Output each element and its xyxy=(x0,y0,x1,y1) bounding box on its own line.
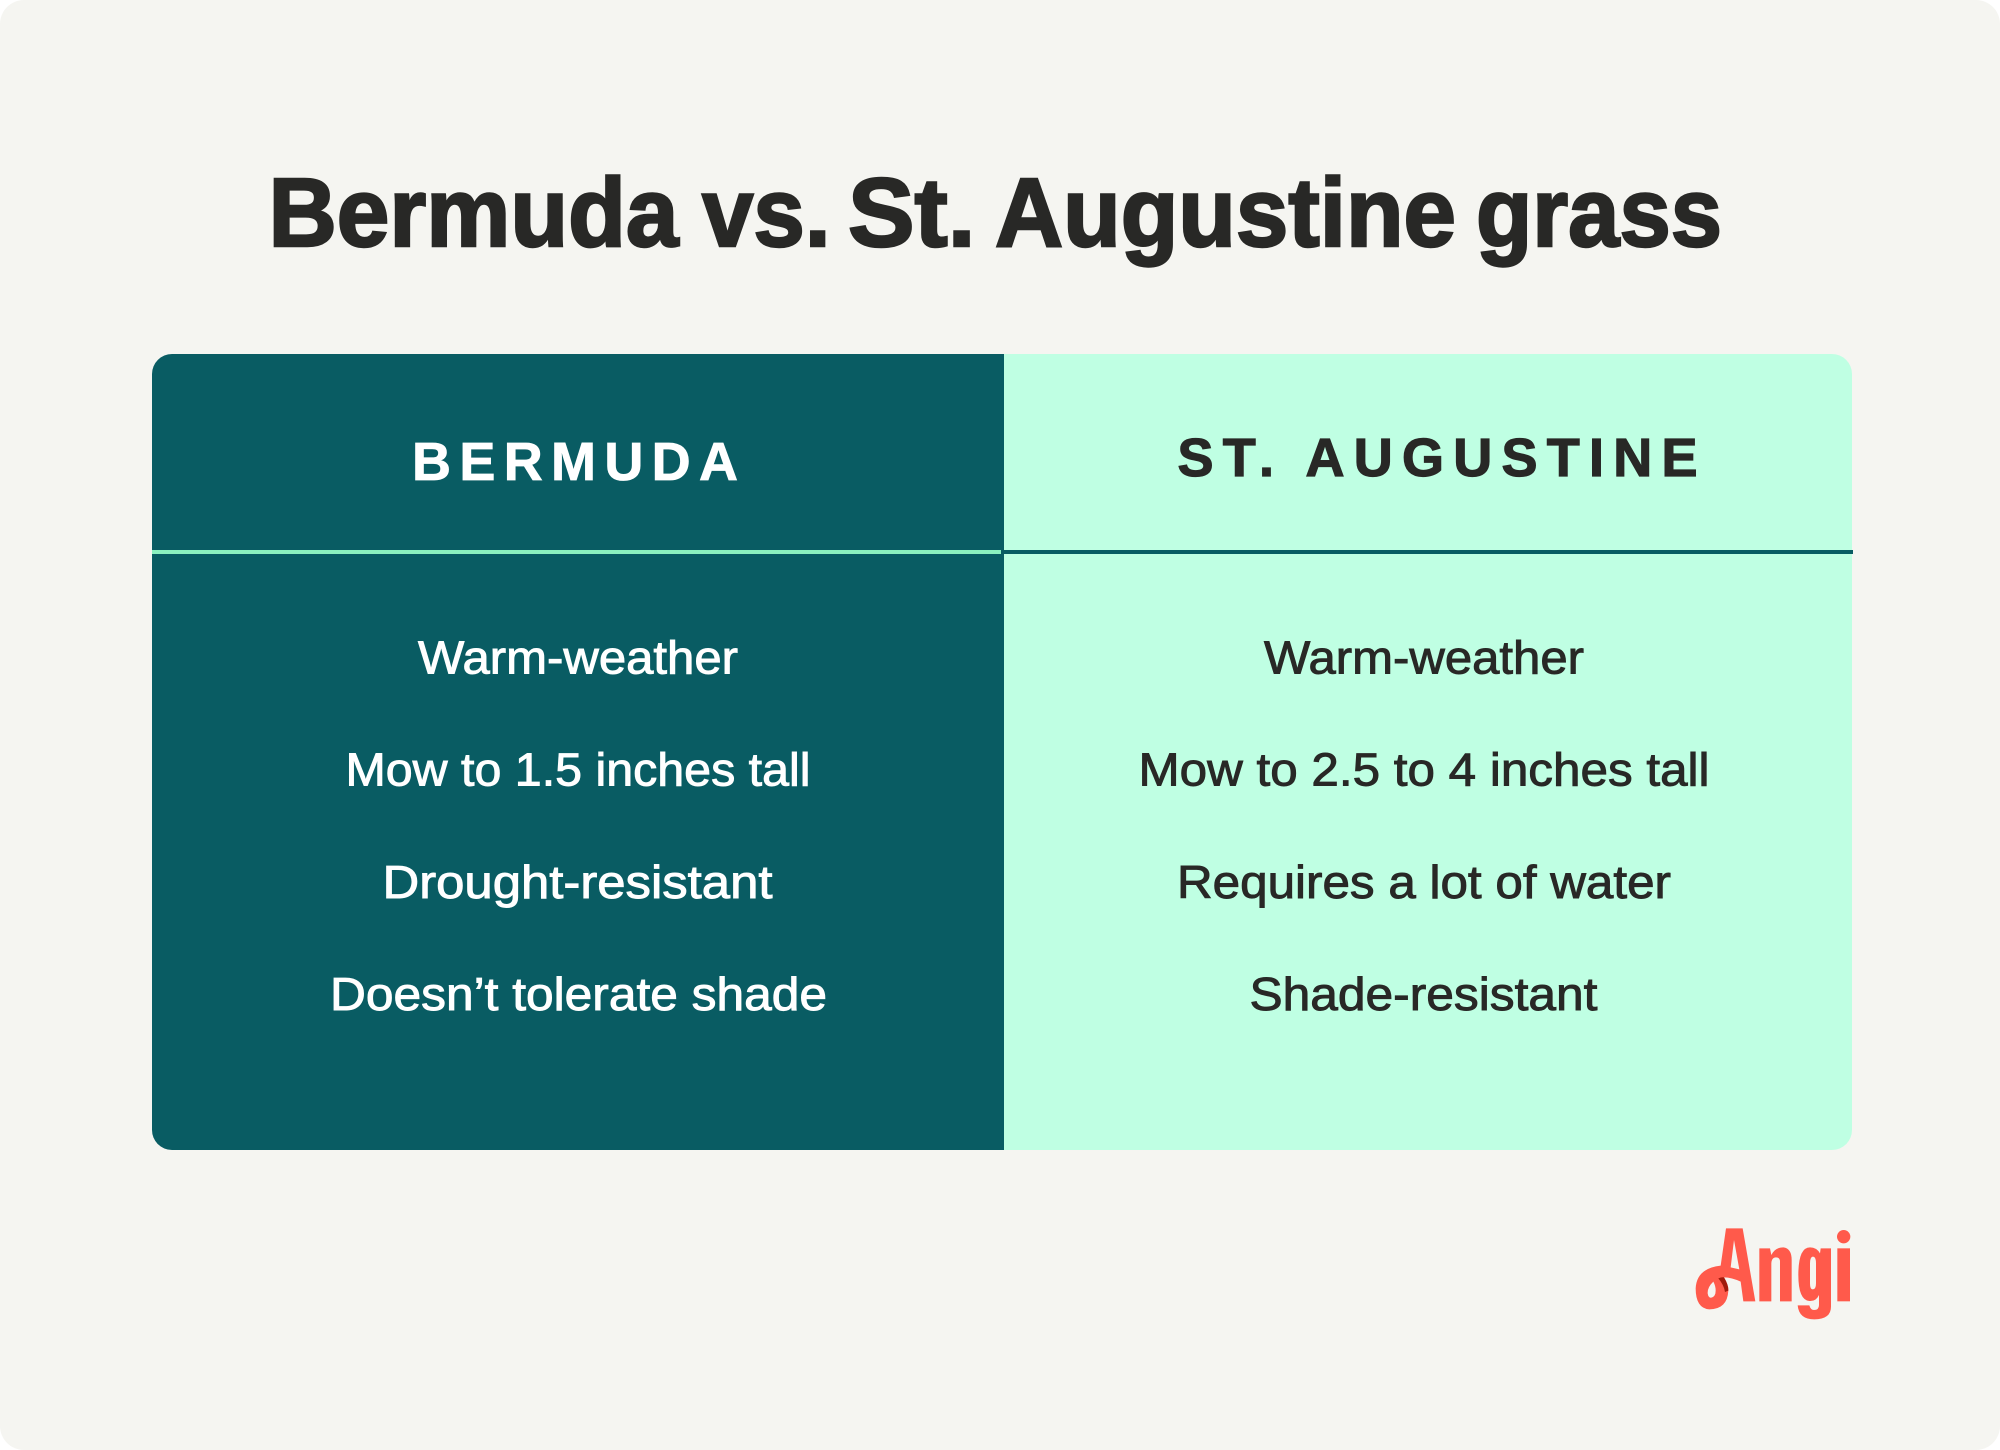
text: Bermuda shade tolerance: Doesn’t tolerate shade xyxy=(330,968,827,1020)
title: grass xyxy=(1476,158,1722,267)
text: Bermuda climate: Warm-weather xyxy=(418,632,738,684)
divider: Bermuda header xyxy=(152,550,1001,554)
title: vs. xyxy=(702,158,830,267)
title xyxy=(268,158,1722,267)
text: Bermuda water needs: Drought-resistant xyxy=(382,856,773,908)
title: Augustine xyxy=(995,158,1456,267)
panel background: St. Augustine xyxy=(1004,354,1852,1150)
text: St. Augustine water needs: Requires a lot of water xyxy=(1177,856,1671,908)
heading: Bermuda: BERMUDA xyxy=(412,432,738,492)
text: Bermuda mowing height: Mow to 1.5 inches tall xyxy=(346,744,810,796)
icon: Angi logo xyxy=(1696,1228,1850,1319)
text: St. Augustine climate: Warm-weather xyxy=(1264,632,1584,684)
panel background: Bermuda xyxy=(152,354,1004,1150)
title: St. xyxy=(848,158,976,267)
text: St. Augustine shade tolerance: Shade-resistant xyxy=(1250,968,1598,1020)
title: Bermuda xyxy=(268,158,680,267)
panel: Bermuda column xyxy=(152,354,1004,1150)
panel: St. Augustine column xyxy=(1004,354,1853,1150)
heading: St. Augustine: ST. AUGUSTINE xyxy=(1178,428,1698,488)
divider: St. Augustine header xyxy=(1004,550,1853,554)
text: St. Augustine mowing height: Mow to 2.5 to 4 inches tall xyxy=(1138,744,1710,796)
